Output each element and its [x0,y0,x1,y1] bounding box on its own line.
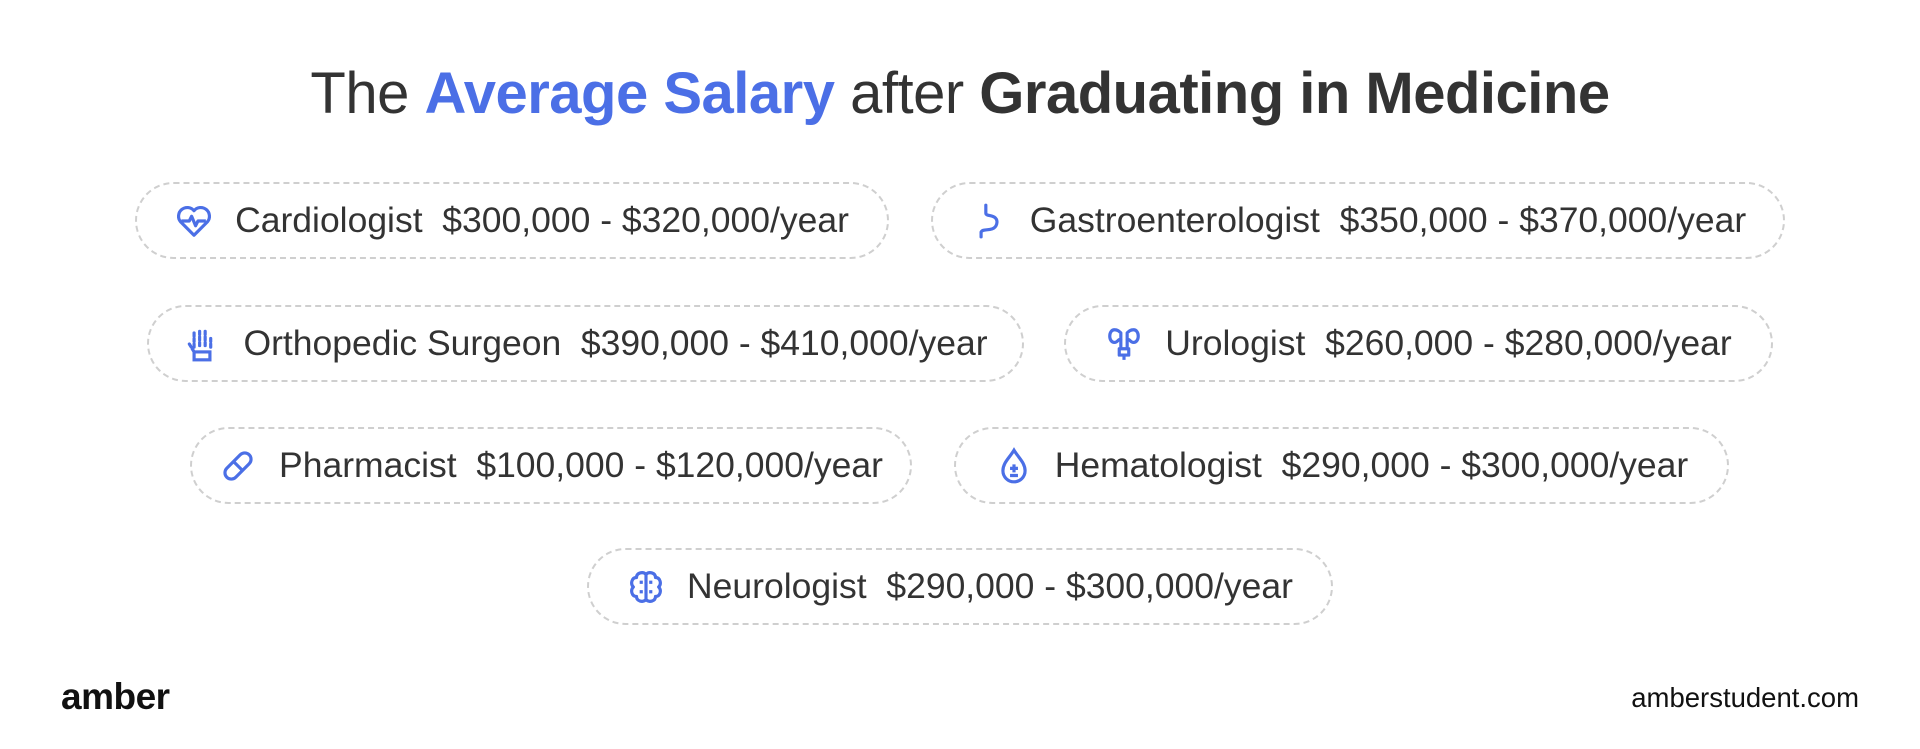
footer url: amberstudent.com [1631,682,1859,713]
pill: urologist [1064,305,1773,382]
pill: urologist: Urologist $260,000 - $280,000/year [1165,323,1732,363]
icon: heart [177,206,211,237]
pill: neurologist: Neurologist $290,000 - $300,000/year [687,566,1293,606]
icon: hand bones [188,330,212,362]
pill: pharmacist [190,427,912,504]
icon: stomach [980,204,999,238]
title: The Average Salary after Graduating in Medicine [310,61,1610,126]
pill: orthopedic surgeon: Orthopedic Surgeon $390,000 - $410,000/year [243,323,988,363]
pill: neurologist [587,548,1333,625]
pill: pharmacist: Pharmacist $100,000 - $120,000/year [279,445,883,485]
pill: gastroenterologist [931,182,1785,259]
pill: orthopedic surgeon [147,305,1024,382]
icon: blood drop [1001,447,1027,484]
pill: gastroenterologist: Gastroenterologist $350,000 - $370,000/year [1030,200,1746,240]
pill: hematologist [954,427,1729,504]
icon: pill capsule [223,451,253,481]
pill: cardiologist: Cardiologist $300,000 - $320,000/year [235,200,849,240]
pill: hematologist: Hematologist $290,000 - $300,000/year [1055,445,1688,485]
icon: brain [630,571,662,603]
icon: kidneys [1108,328,1140,360]
pill: cardiologist [135,182,889,259]
logo: amber: amber [61,676,170,717]
